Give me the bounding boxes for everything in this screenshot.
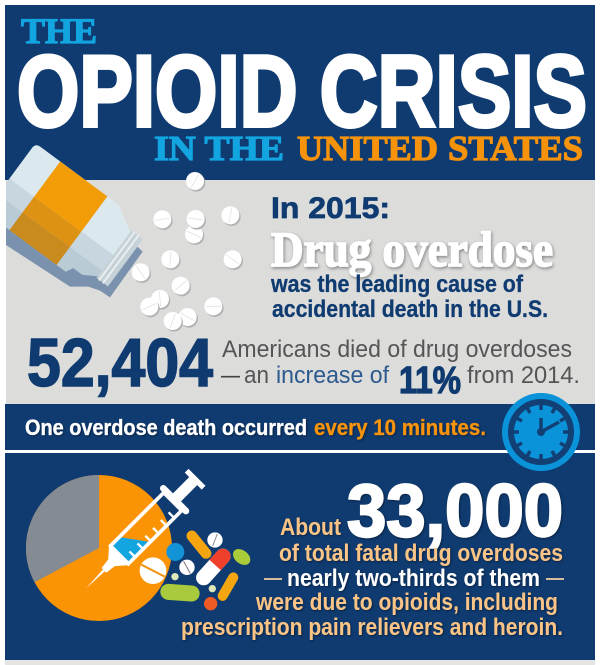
bottle body [6,145,143,286]
icon: clock [502,393,580,471]
plunger rod [172,476,198,502]
light stripe [10,145,138,264]
panel: 33,000 opioid deaths [5,453,595,660]
subtitle: UNITED: UNITED [297,129,438,168]
panel: 2015 statistics [6,180,595,404]
title: THE: THE [21,11,97,51]
panel: every 10 minutes band [5,404,595,450]
dash right [546,578,564,580]
number: 11%: 11% [399,360,461,402]
text: Americans died: Americans died of drug overdoses [222,336,572,363]
text: accidental death: accidental death in the U.S. [272,296,548,323]
needle [85,569,106,589]
dash left [264,578,282,580]
lower stripe [6,200,113,285]
text: every 10 minutes: every 10 minutes. [314,415,486,440]
label: middle [23,197,81,247]
scattered pills [128,169,245,333]
subtitle: STATES: STATES [448,129,583,168]
illustration: syringe and pills [72,464,253,610]
hub [94,545,129,580]
illustration: pill bottle [0,143,245,333]
label: lower [9,212,70,265]
panel: title header [5,5,595,180]
number: 33,000: 33,000 [347,469,563,552]
text: one overdose death: One overdose death occurred [25,415,307,440]
middle stripe [0,179,125,279]
flange [159,484,191,516]
pie grey wedge [26,475,99,582]
footer strip [5,660,595,665]
text: dash: — [221,362,240,389]
text: from 2014: from 2014. [467,362,580,389]
bottle shadow [6,227,143,297]
heading: In 2015: In 2015: [271,192,390,225]
colored pills [140,528,253,610]
text: an: an [244,362,269,389]
headline: Drug overdose: Drug overdose [271,221,553,277]
chart: pie two-thirds opioids [26,475,172,621]
label: bright [34,161,107,232]
liquid [112,525,149,562]
text: of total fatal: of total fatal drug overdoses [279,540,563,567]
text: nearly two-thirds: nearly two-thirds of them [287,565,540,592]
syringe [72,464,211,602]
text: leading cause: was the leading cause of [270,271,524,298]
barrel [111,493,182,564]
text: due to opioids: were due to opioids, including [255,589,558,616]
measure ticks [129,511,175,557]
neck ridges [96,230,143,287]
text: About: About [280,514,341,541]
text: increase of: increase of [276,362,389,389]
plunger thumb [185,469,205,490]
subtitle: IN THE: IN THE [154,129,284,168]
number: 52,404: 52,404 [27,325,213,401]
